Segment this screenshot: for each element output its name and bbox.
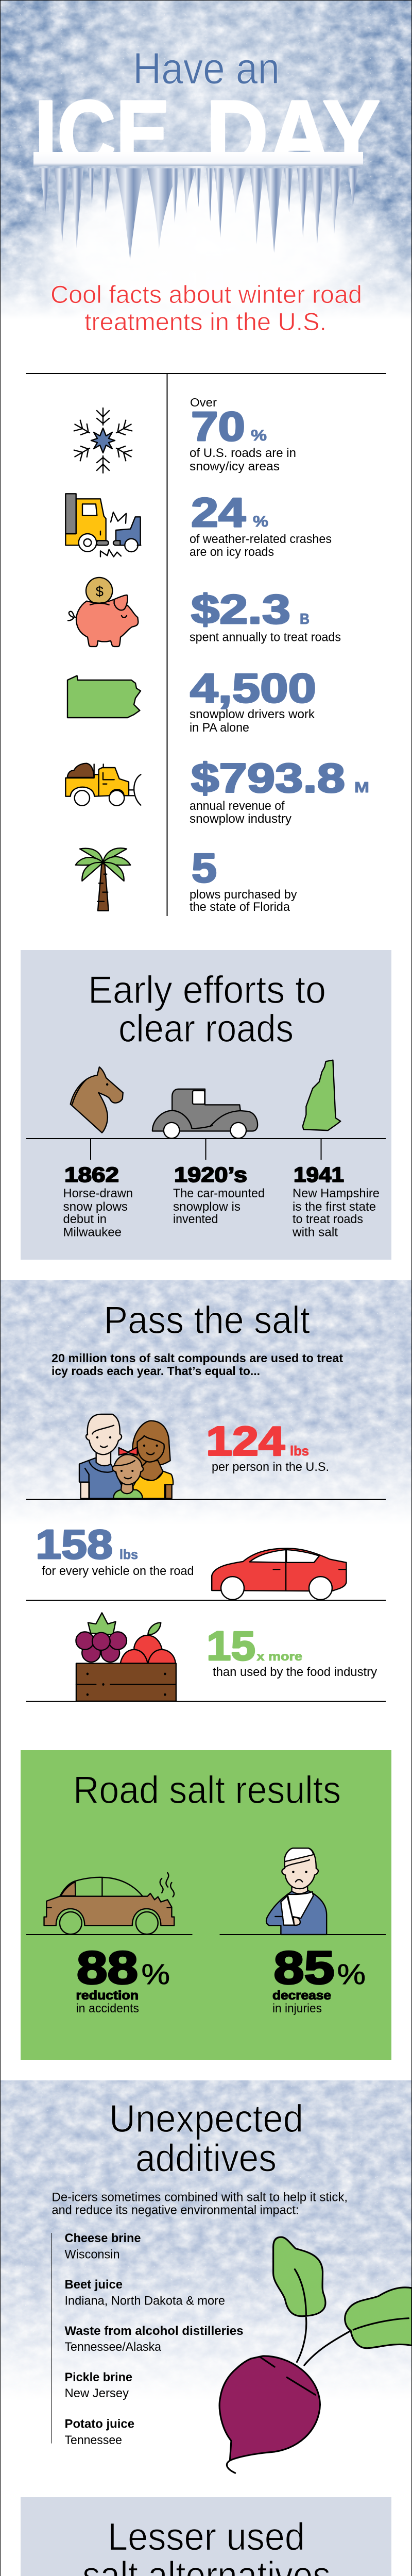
icon: palm tree xyxy=(76,848,130,911)
heading: lesser used: Lesser used xyxy=(108,2515,305,2558)
stat: 2.3 billion xyxy=(190,586,341,644)
milestone: 1941: to treat roads xyxy=(293,1212,363,1226)
icon: snowflake xyxy=(72,408,134,473)
subtitle xyxy=(50,281,362,336)
milestone: 1941: New Hampshire xyxy=(293,1187,380,1200)
milestone: 1862: snow plows xyxy=(63,1200,128,1214)
intro text: 20 million tons of salt compounds are used to treat xyxy=(52,1351,343,1365)
icicles xyxy=(40,168,358,260)
stat: 793.8 million xyxy=(190,755,369,826)
stat: 2.3 billion: $2.3 xyxy=(191,586,290,632)
stat: 70 percent: snowy/icy areas xyxy=(190,460,280,473)
milestone: 1920s: snowplow is xyxy=(173,1200,241,1214)
additives list: Potato juice xyxy=(65,2417,134,2431)
stat: 4,500 xyxy=(190,665,316,735)
stat: 158 lbs xyxy=(36,1521,194,1578)
stat: 85 percent xyxy=(272,1942,366,2015)
icon: red car xyxy=(212,1548,346,1600)
additives list: Wisconsin xyxy=(65,2247,119,2262)
stat: 15x more: 15 xyxy=(207,1623,255,1669)
title xyxy=(33,53,380,166)
milestone: 1862: Milwaukee xyxy=(63,1225,122,1240)
heading: road salt results: Road salt results xyxy=(73,1768,341,1811)
panel: early efforts xyxy=(21,950,391,1260)
icon: piggy bank: $ xyxy=(96,583,104,599)
title: DAY xyxy=(206,80,380,187)
stat: 124 lbs xyxy=(206,1418,329,1474)
stat: 15x more xyxy=(207,1623,377,1679)
stat: 70 percent: of U.S. roads are in xyxy=(190,446,296,460)
additives list: Indiana, North Dakota & more xyxy=(65,2294,225,2308)
stat: 4,500: 4,500 xyxy=(190,665,316,711)
subtitle: Cool facts about winter road xyxy=(50,281,362,309)
heading: lesser used xyxy=(82,2515,331,2576)
additives list: Tennessee/Alaska xyxy=(65,2340,162,2354)
stat: 5 plows xyxy=(190,845,297,914)
icon: piggy bank xyxy=(68,578,138,647)
ice background xyxy=(0,1280,412,1528)
ice background xyxy=(0,2080,412,2403)
stat: 124 lbs: per person in the U.S. xyxy=(212,1460,329,1474)
heading: early efforts: Early efforts to xyxy=(88,968,326,1011)
stat: 88 percent xyxy=(76,1942,170,2015)
icon: injured person xyxy=(266,1848,327,1935)
milestone: 1941: with salt xyxy=(292,1225,338,1240)
stat: 85 percent: in injuries xyxy=(272,2002,322,2015)
stat: 85 percent: % xyxy=(337,1958,366,1990)
panel: road salt results xyxy=(21,1750,391,2060)
panel: quick stats xyxy=(26,373,386,916)
stat: 70 percent: % xyxy=(251,427,267,444)
heading: early efforts: clear roads xyxy=(118,1007,294,1050)
stat: 88 percent: % xyxy=(141,1958,170,1990)
heading: pass the salt: Pass the salt xyxy=(104,1298,310,1342)
stat: 5 plows: the state of Florida xyxy=(190,900,290,914)
milestone: 1920s: invented xyxy=(173,1212,218,1226)
panel: unexpected additives xyxy=(0,2080,412,2473)
stat: 24 percent: % xyxy=(253,513,268,530)
icon: Pennsylvania xyxy=(67,676,141,718)
icon: wrecked car xyxy=(44,1873,174,1934)
heading: unexpected additives: Unexpected xyxy=(109,2097,303,2140)
milestone: 1862: 1862 xyxy=(64,1163,119,1187)
additives list: Waste from alcohol distilleries xyxy=(65,2324,243,2338)
title: Have an xyxy=(133,44,280,93)
stat: 5 plows: 5 xyxy=(192,845,217,891)
stat: 4,500: snowplow drivers work xyxy=(190,707,315,721)
intro text: De-icers sometimes combined with salt to help it stick, xyxy=(52,2191,348,2205)
intro text xyxy=(52,1351,343,1378)
stat: 2.3 billion: B xyxy=(300,611,310,628)
intro text xyxy=(52,2191,348,2217)
stat: 85 percent: 85 xyxy=(274,1942,335,1994)
stat: 24 percent: are on icy roads xyxy=(190,545,274,559)
icon: fruit crate xyxy=(76,1613,176,1701)
icon: vintage car xyxy=(152,1089,258,1138)
additives list: New Jersey xyxy=(65,2386,129,2400)
icon: horse xyxy=(71,1067,123,1133)
panel: lesser used salt alternatives xyxy=(21,2497,412,2576)
stat: 24 percent: 24 xyxy=(191,489,246,535)
milestone: 1920s: The car-mounted xyxy=(173,1187,265,1200)
stat: 70 percent xyxy=(190,396,296,473)
heading: early efforts xyxy=(88,968,326,1050)
stat: 70 percent: 70 xyxy=(191,403,245,449)
panel: pass the salt xyxy=(0,1280,412,1702)
stat: 793.8 million: annual revenue of xyxy=(190,799,285,813)
milestone: 1862 xyxy=(63,1163,133,1240)
milestone: 1941: 1941 xyxy=(294,1163,344,1187)
stat: 88 percent: reduction xyxy=(76,1989,139,2003)
milestone: 1862: debut in xyxy=(63,1212,107,1226)
stat: 85 percent: decrease xyxy=(272,1989,331,2003)
stat: 793.8 million: snowplow industry xyxy=(190,812,291,826)
heading: unexpected additives xyxy=(109,2097,303,2179)
stat: 5 plows: plows purchased by xyxy=(190,888,297,902)
stat: 124 lbs: lbs xyxy=(290,1443,309,1459)
stat: 15x more: x more xyxy=(256,1650,302,1663)
heading: unexpected additives: additives xyxy=(135,2136,277,2179)
additives list: Beet juice xyxy=(65,2278,123,2292)
stat: 88 percent: 88 xyxy=(77,1942,138,1994)
milestone: 1862: Horse-drawn xyxy=(63,1187,133,1200)
icon: family xyxy=(79,1414,173,1498)
stat: 124 lbs: 124 xyxy=(206,1418,285,1464)
milestone: 1920s xyxy=(173,1163,265,1226)
title: ICE xyxy=(35,80,170,187)
icon: plow truck xyxy=(65,764,141,806)
icon: truck crash xyxy=(65,494,141,557)
hero background: ice texture xyxy=(0,0,412,335)
stat: 793.8 million: $793.8 xyxy=(191,755,345,801)
intro text: icy roads each year. That’s equal to... xyxy=(52,1364,260,1378)
additives list: Cheese brine xyxy=(65,2231,141,2245)
stat: 158 lbs: lbs xyxy=(119,1547,138,1562)
stat: 15x more: than used by the food industry xyxy=(213,1665,377,1679)
stat: 4,500: in PA alone xyxy=(190,721,249,735)
subtitle: treatments in the U.S. xyxy=(84,309,327,336)
timeline xyxy=(26,1138,386,1160)
milestone: 1941 xyxy=(292,1163,380,1240)
stat: 24 percent: of weather-related crashes xyxy=(190,532,332,546)
additives list xyxy=(52,2231,243,2447)
icon: New Hampshire xyxy=(303,1060,340,1130)
milestone: 1920s: 1920’s xyxy=(174,1163,247,1187)
stat: 158 lbs: for every vehicle on the road xyxy=(42,1564,194,1578)
stat: 88 percent: in accidents xyxy=(76,2002,139,2015)
additives list: Tennessee xyxy=(65,2433,122,2447)
stat: 793.8 million: M xyxy=(354,779,369,796)
intro text: and reduce its negative environmental impact: xyxy=(52,2203,299,2217)
milestone: 1941: is the first state xyxy=(293,1200,376,1214)
stat: 158 lbs: 158 xyxy=(36,1521,113,1567)
icon: beet xyxy=(219,2237,412,2473)
stat: 70 percent: Over xyxy=(190,396,217,409)
stat: 24 percent xyxy=(190,489,332,559)
stat: 2.3 billion: spent annually to treat roads xyxy=(190,631,341,644)
additives list: Pickle brine xyxy=(65,2370,132,2384)
